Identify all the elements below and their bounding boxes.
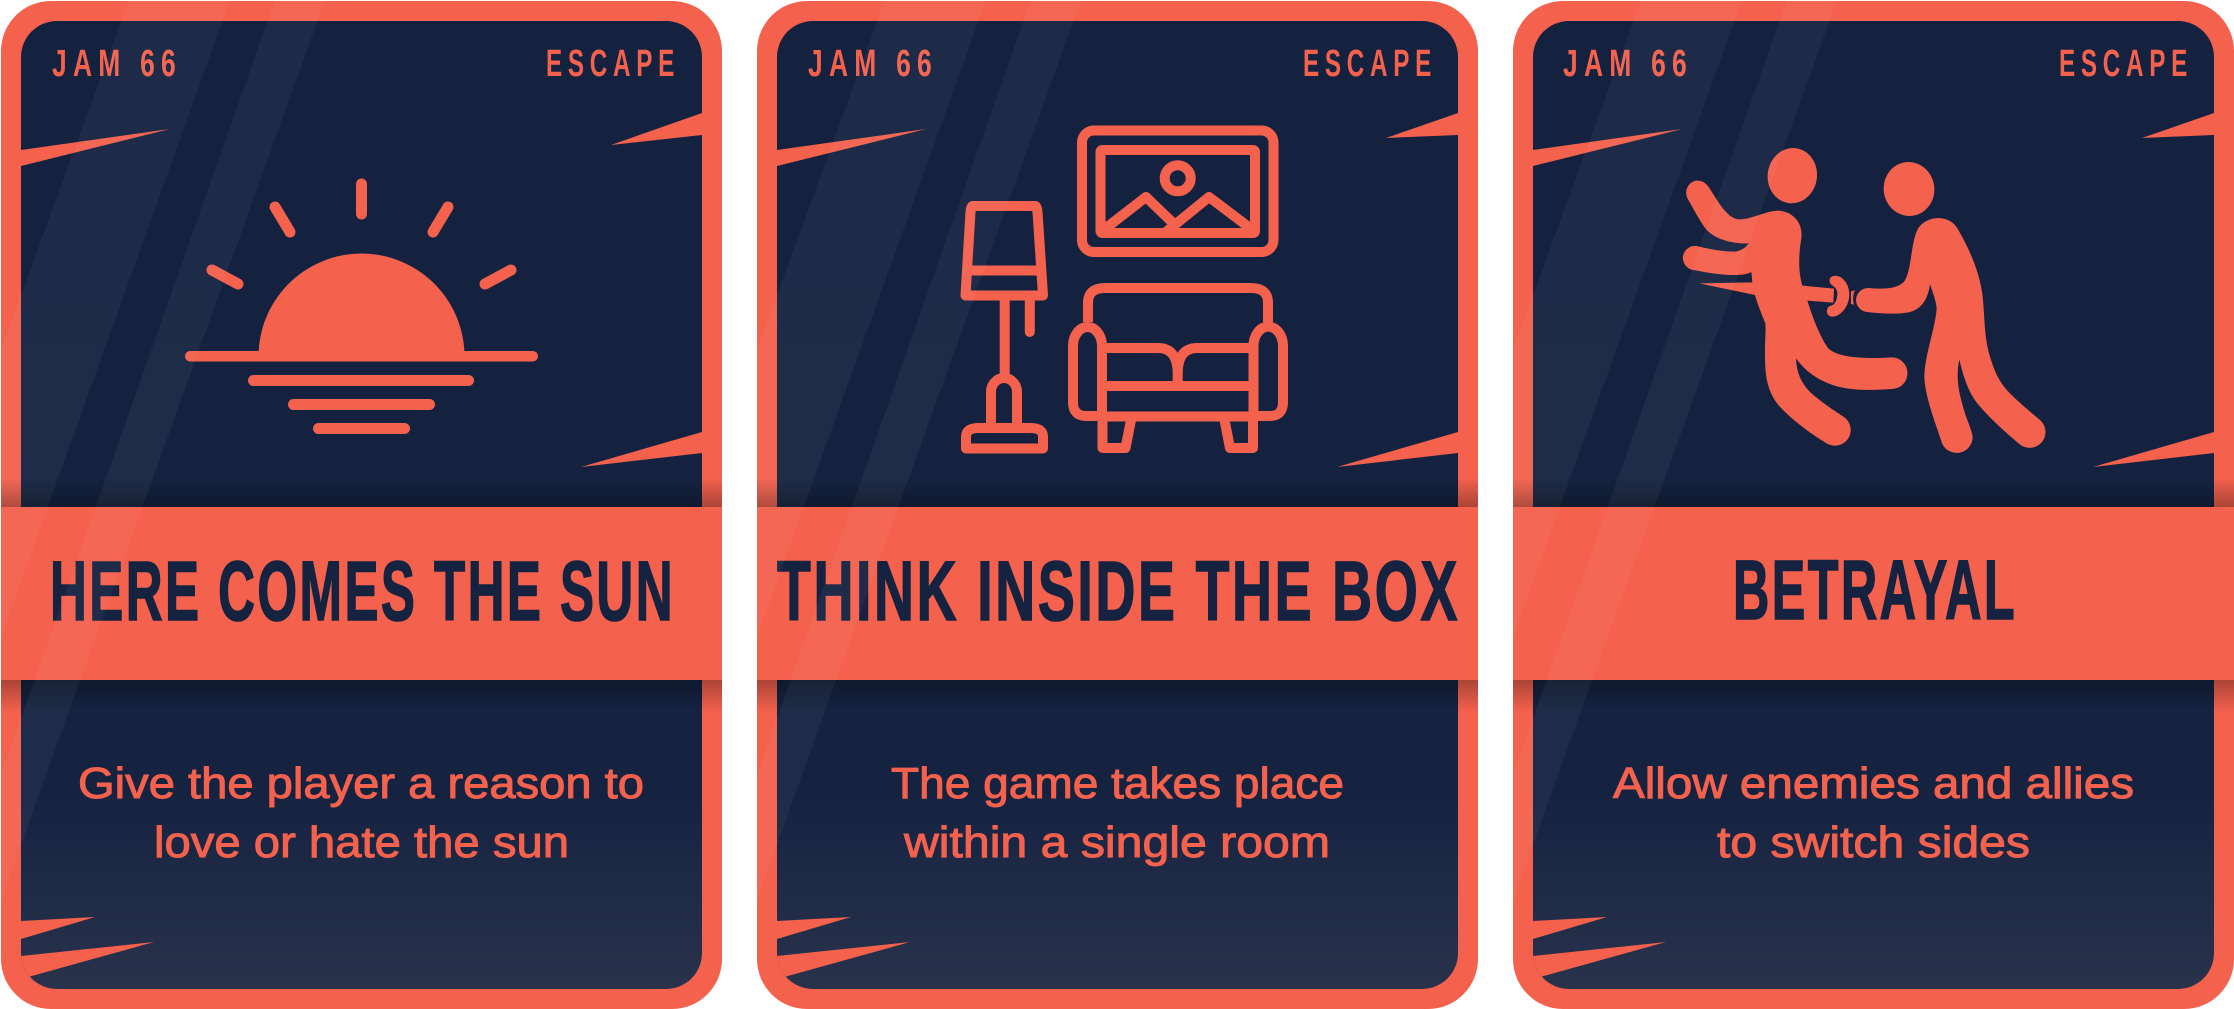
card frame — [1, 1, 722, 1009]
card navy background — [777, 21, 1458, 989]
card navy background — [1533, 21, 2214, 989]
card description: The game takes place — [891, 759, 1344, 808]
card description — [1613, 759, 2134, 867]
card frame — [757, 1, 1478, 1009]
icon: room with lamp, picture and sofa — [966, 130, 1283, 448]
card description — [891, 759, 1344, 867]
card navy background — [21, 21, 702, 989]
floor lamp — [966, 206, 1043, 448]
glass stripes — [777, 21, 1073, 843]
card description — [78, 759, 644, 867]
corner spikes — [777, 113, 1458, 979]
card description: to switch sides — [1717, 818, 2030, 867]
picture frame — [1082, 130, 1274, 252]
band shadows — [1, 478, 722, 712]
corner spikes — [1533, 113, 2214, 979]
tag: jam 66: JAM 66 — [1563, 43, 1693, 85]
card description: within a single room — [903, 818, 1330, 867]
victim figure — [1683, 145, 1907, 446]
card description: love or hate the sun — [154, 818, 569, 867]
band shadows — [1513, 478, 2234, 712]
title band — [757, 507, 1478, 680]
title band — [1513, 507, 2234, 680]
attacker figure — [1856, 159, 2045, 453]
card title: BETRAYAL — [1733, 543, 2017, 637]
tag: jam 66: JAM 66 — [808, 43, 938, 85]
card title: THINK INSIDE THE BOX — [777, 544, 1460, 638]
icon: setting sun — [185, 184, 538, 434]
glass stripes — [21, 21, 317, 843]
tag: escape: ESCAPE — [546, 43, 680, 85]
glass stripes — [1533, 21, 1829, 843]
card frame — [1513, 1, 2234, 1009]
band shadows — [757, 478, 1478, 712]
tag: escape: ESCAPE — [1303, 43, 1437, 85]
card: think inside the box — [757, 0, 1478, 1009]
card description: Give the player a reason to — [78, 759, 644, 808]
card: betrayal — [1513, 0, 2234, 1009]
card description: Allow enemies and allies — [1613, 759, 2134, 808]
card title: HERE COMES THE SUN — [50, 544, 675, 638]
card: here comes the sun — [1, 0, 722, 1009]
sword guard — [1827, 276, 1855, 317]
corner spikes — [21, 113, 702, 979]
icon: figure stabbing another in the back — [1683, 145, 2045, 453]
sofa — [1073, 288, 1283, 448]
title band — [1, 507, 722, 680]
tag: jam 66: JAM 66 — [52, 43, 182, 85]
